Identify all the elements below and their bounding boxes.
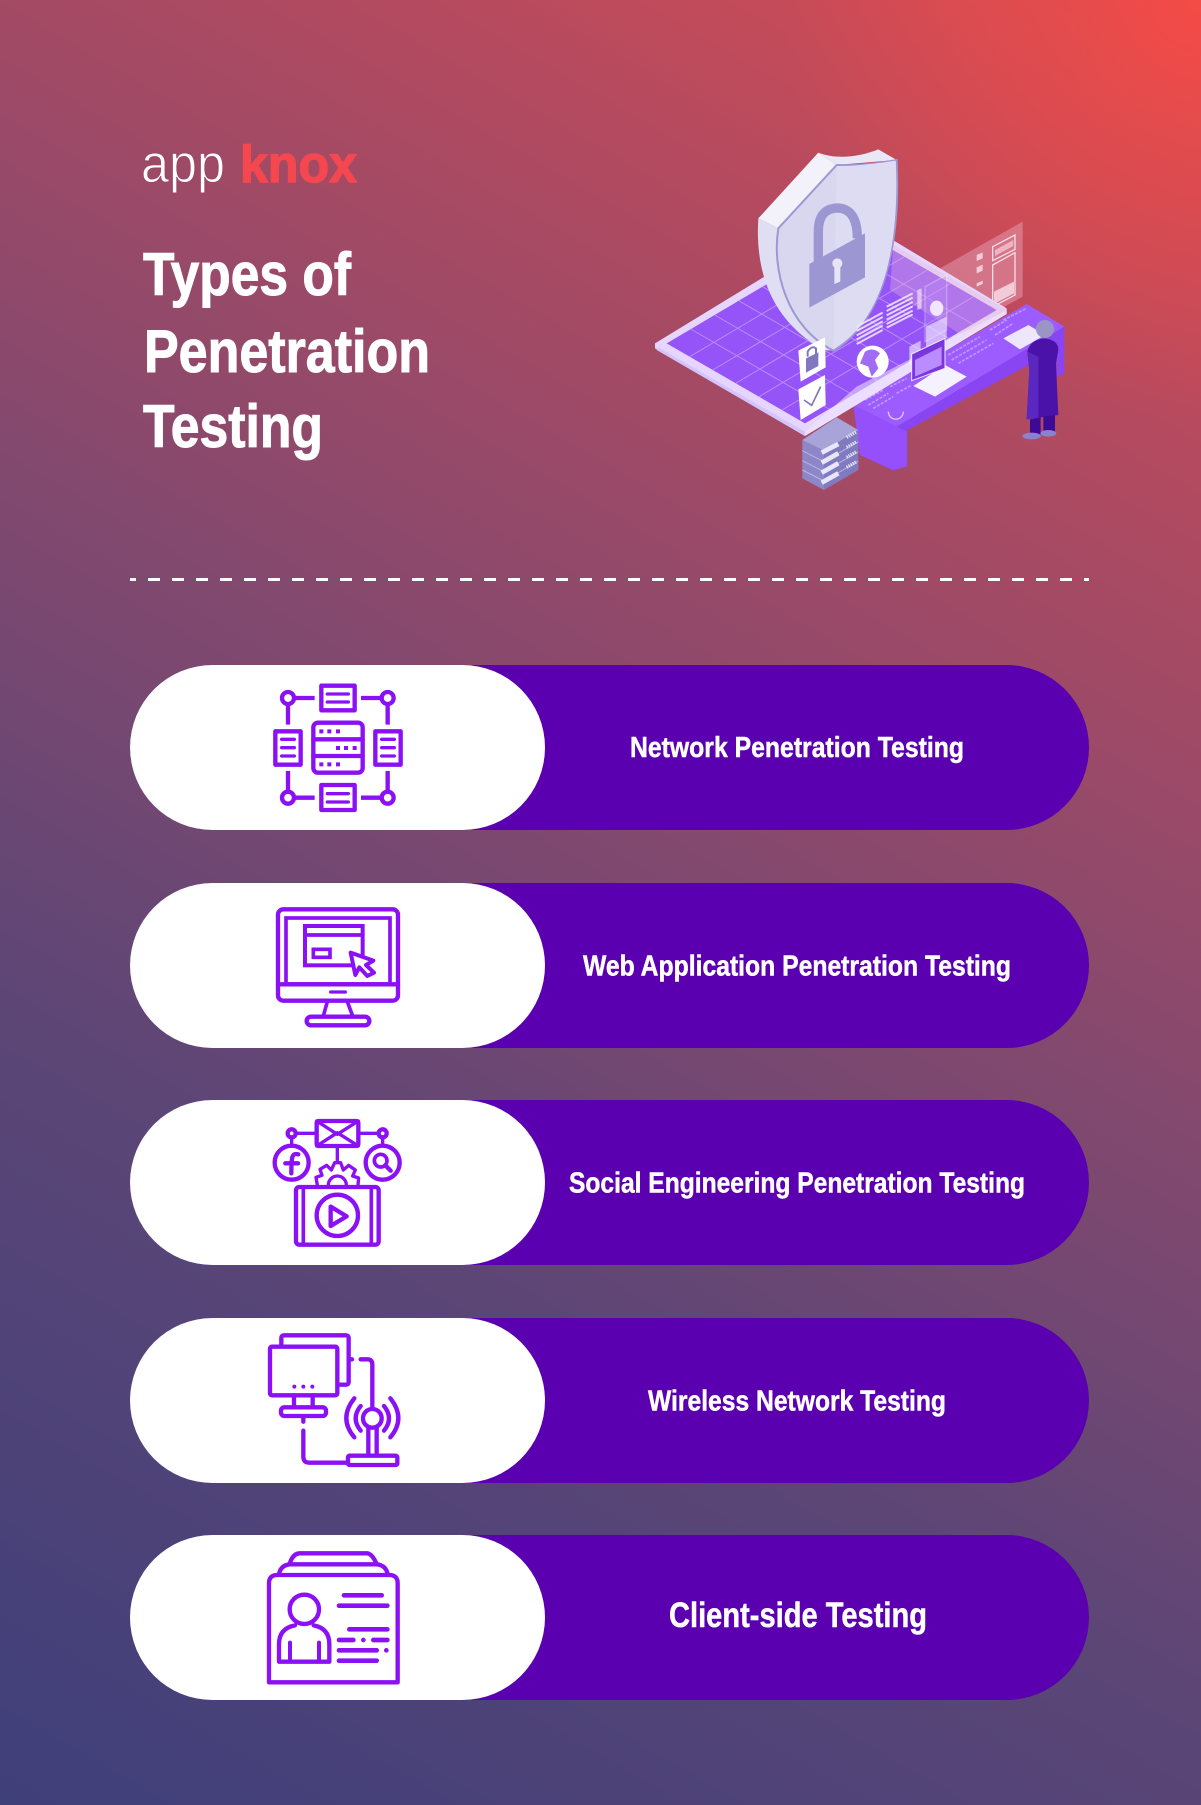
translucent back panel <box>940 222 1023 317</box>
title: Penetration <box>144 318 430 385</box>
row 2: Web Application Penetration Testing: Web Application Penetration Testing <box>583 951 1011 983</box>
title <box>143 241 430 460</box>
dashed divider <box>130 578 1089 581</box>
title: Testing <box>143 393 323 460</box>
row 3: Social Engineering Penetration Testing: Social Engineering Penetration Testing <box>569 1168 1025 1200</box>
server stack <box>802 417 858 490</box>
row 2: Web Application Penetration Testing <box>130 883 1089 1048</box>
row 5: Client-side Testing <box>130 1535 1089 1700</box>
icon: client profile card <box>269 1553 398 1682</box>
small tiles: lock and chart <box>798 337 826 420</box>
desk <box>853 304 1064 471</box>
row 4: Wireless Network Testing: Wireless Network Testing <box>648 1386 946 1418</box>
row 5: Client-side Testing: Client-side Testing <box>669 1596 927 1635</box>
icon: network servers <box>275 686 401 810</box>
logo: appknox: knox <box>240 136 357 194</box>
globe <box>857 346 889 378</box>
row 4: Wireless Network Testing <box>130 1318 1089 1483</box>
icon: social media engineering <box>275 1121 400 1245</box>
icon: monitor with cursor <box>278 909 398 1025</box>
row 1: Network Penetration Testing <box>130 665 1089 830</box>
row 1: Network Penetration Testing: Network Penetration Testing <box>630 732 964 764</box>
person <box>1003 320 1058 439</box>
logo: appknox: app <box>141 134 225 194</box>
logo: appknox <box>141 134 357 194</box>
shield with padlock <box>758 149 897 351</box>
platform with grid <box>655 219 1007 436</box>
laptop <box>912 338 967 397</box>
title: Types of <box>143 241 352 308</box>
illustration: isometric shield and security platform <box>655 149 1064 490</box>
icon: wireless antenna and monitor <box>270 1335 398 1465</box>
floating data panels <box>857 275 947 365</box>
row 3: Social Engineering Penetration Testing <box>130 1100 1089 1265</box>
